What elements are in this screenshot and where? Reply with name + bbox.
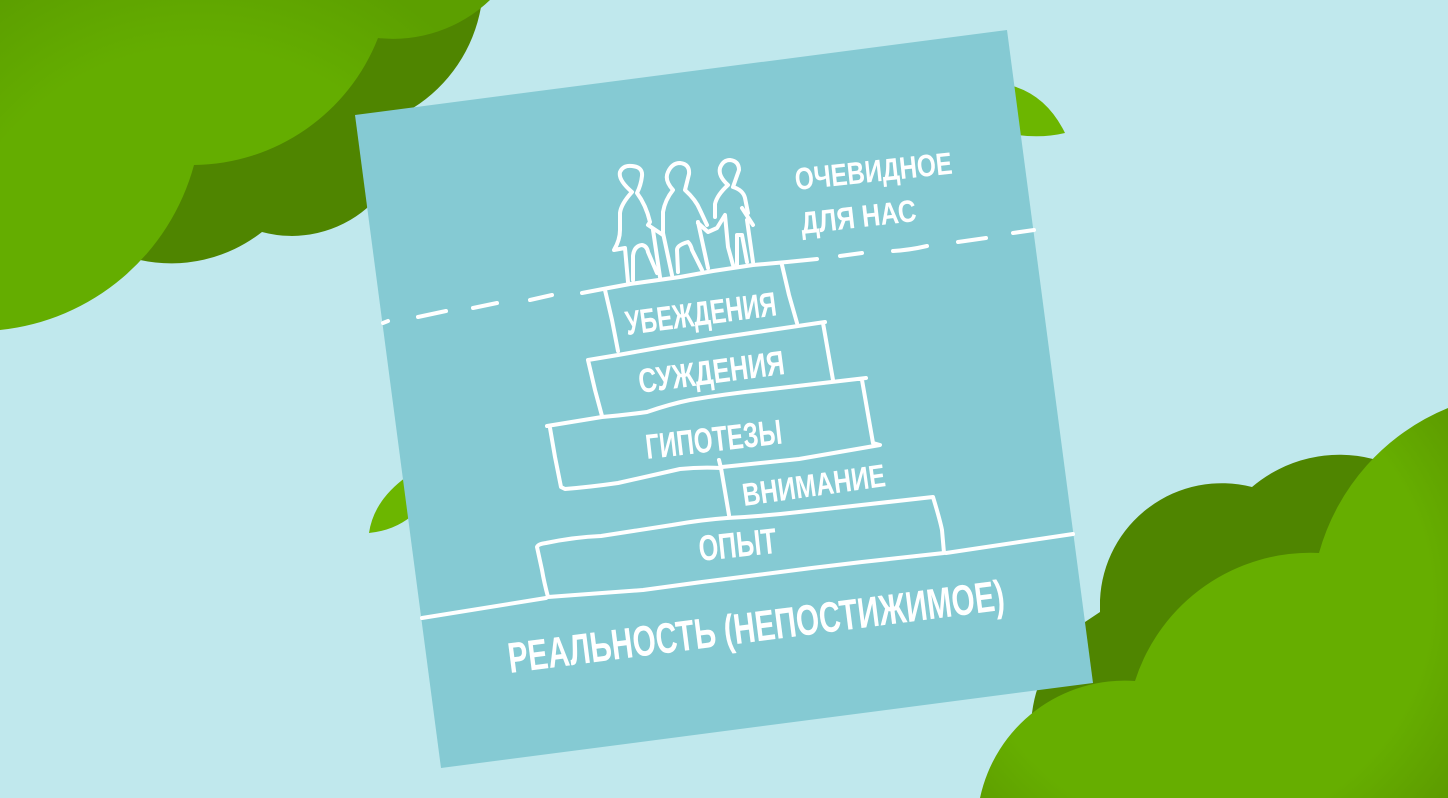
bush shadow: top left: [100, 0, 481, 263]
label: judgments: СУЖДЕНИЯ: [636, 344, 787, 401]
step: experience: [537, 497, 944, 597]
leaf: right: [1005, 84, 1065, 136]
label: reality: РЕАЛЬНОСТЬ (НЕПОСТИЖИМОЕ): [505, 572, 1007, 683]
label: experience: ОПЫТ: [697, 520, 778, 569]
label: attention: ВНИМАНИЕ: [740, 457, 888, 513]
step: judgments: [588, 322, 833, 416]
label: for us: ДЛЯ НАС: [799, 193, 918, 241]
icon: three people: [614, 160, 753, 282]
panel: diagram card: [355, 30, 1093, 768]
bush shadow: bottom right: [1032, 455, 1448, 798]
bush: bottom right: [980, 408, 1448, 798]
step: hypotheses: [547, 378, 880, 489]
ground line: [422, 534, 1073, 618]
label: obvious: ОЧЕВИДНОЕ: [793, 146, 954, 197]
step: attention connector: [719, 460, 729, 515]
dashed horizon line: [383, 230, 1034, 323]
leaf: left: [369, 473, 420, 533]
bush: top left: [0, 0, 490, 330]
step: beliefs: [582, 259, 817, 351]
label: hypotheses: ГИПОТЕЗЫ: [643, 413, 784, 467]
label: beliefs: УБЕЖДЕНИЯ: [623, 285, 779, 343]
